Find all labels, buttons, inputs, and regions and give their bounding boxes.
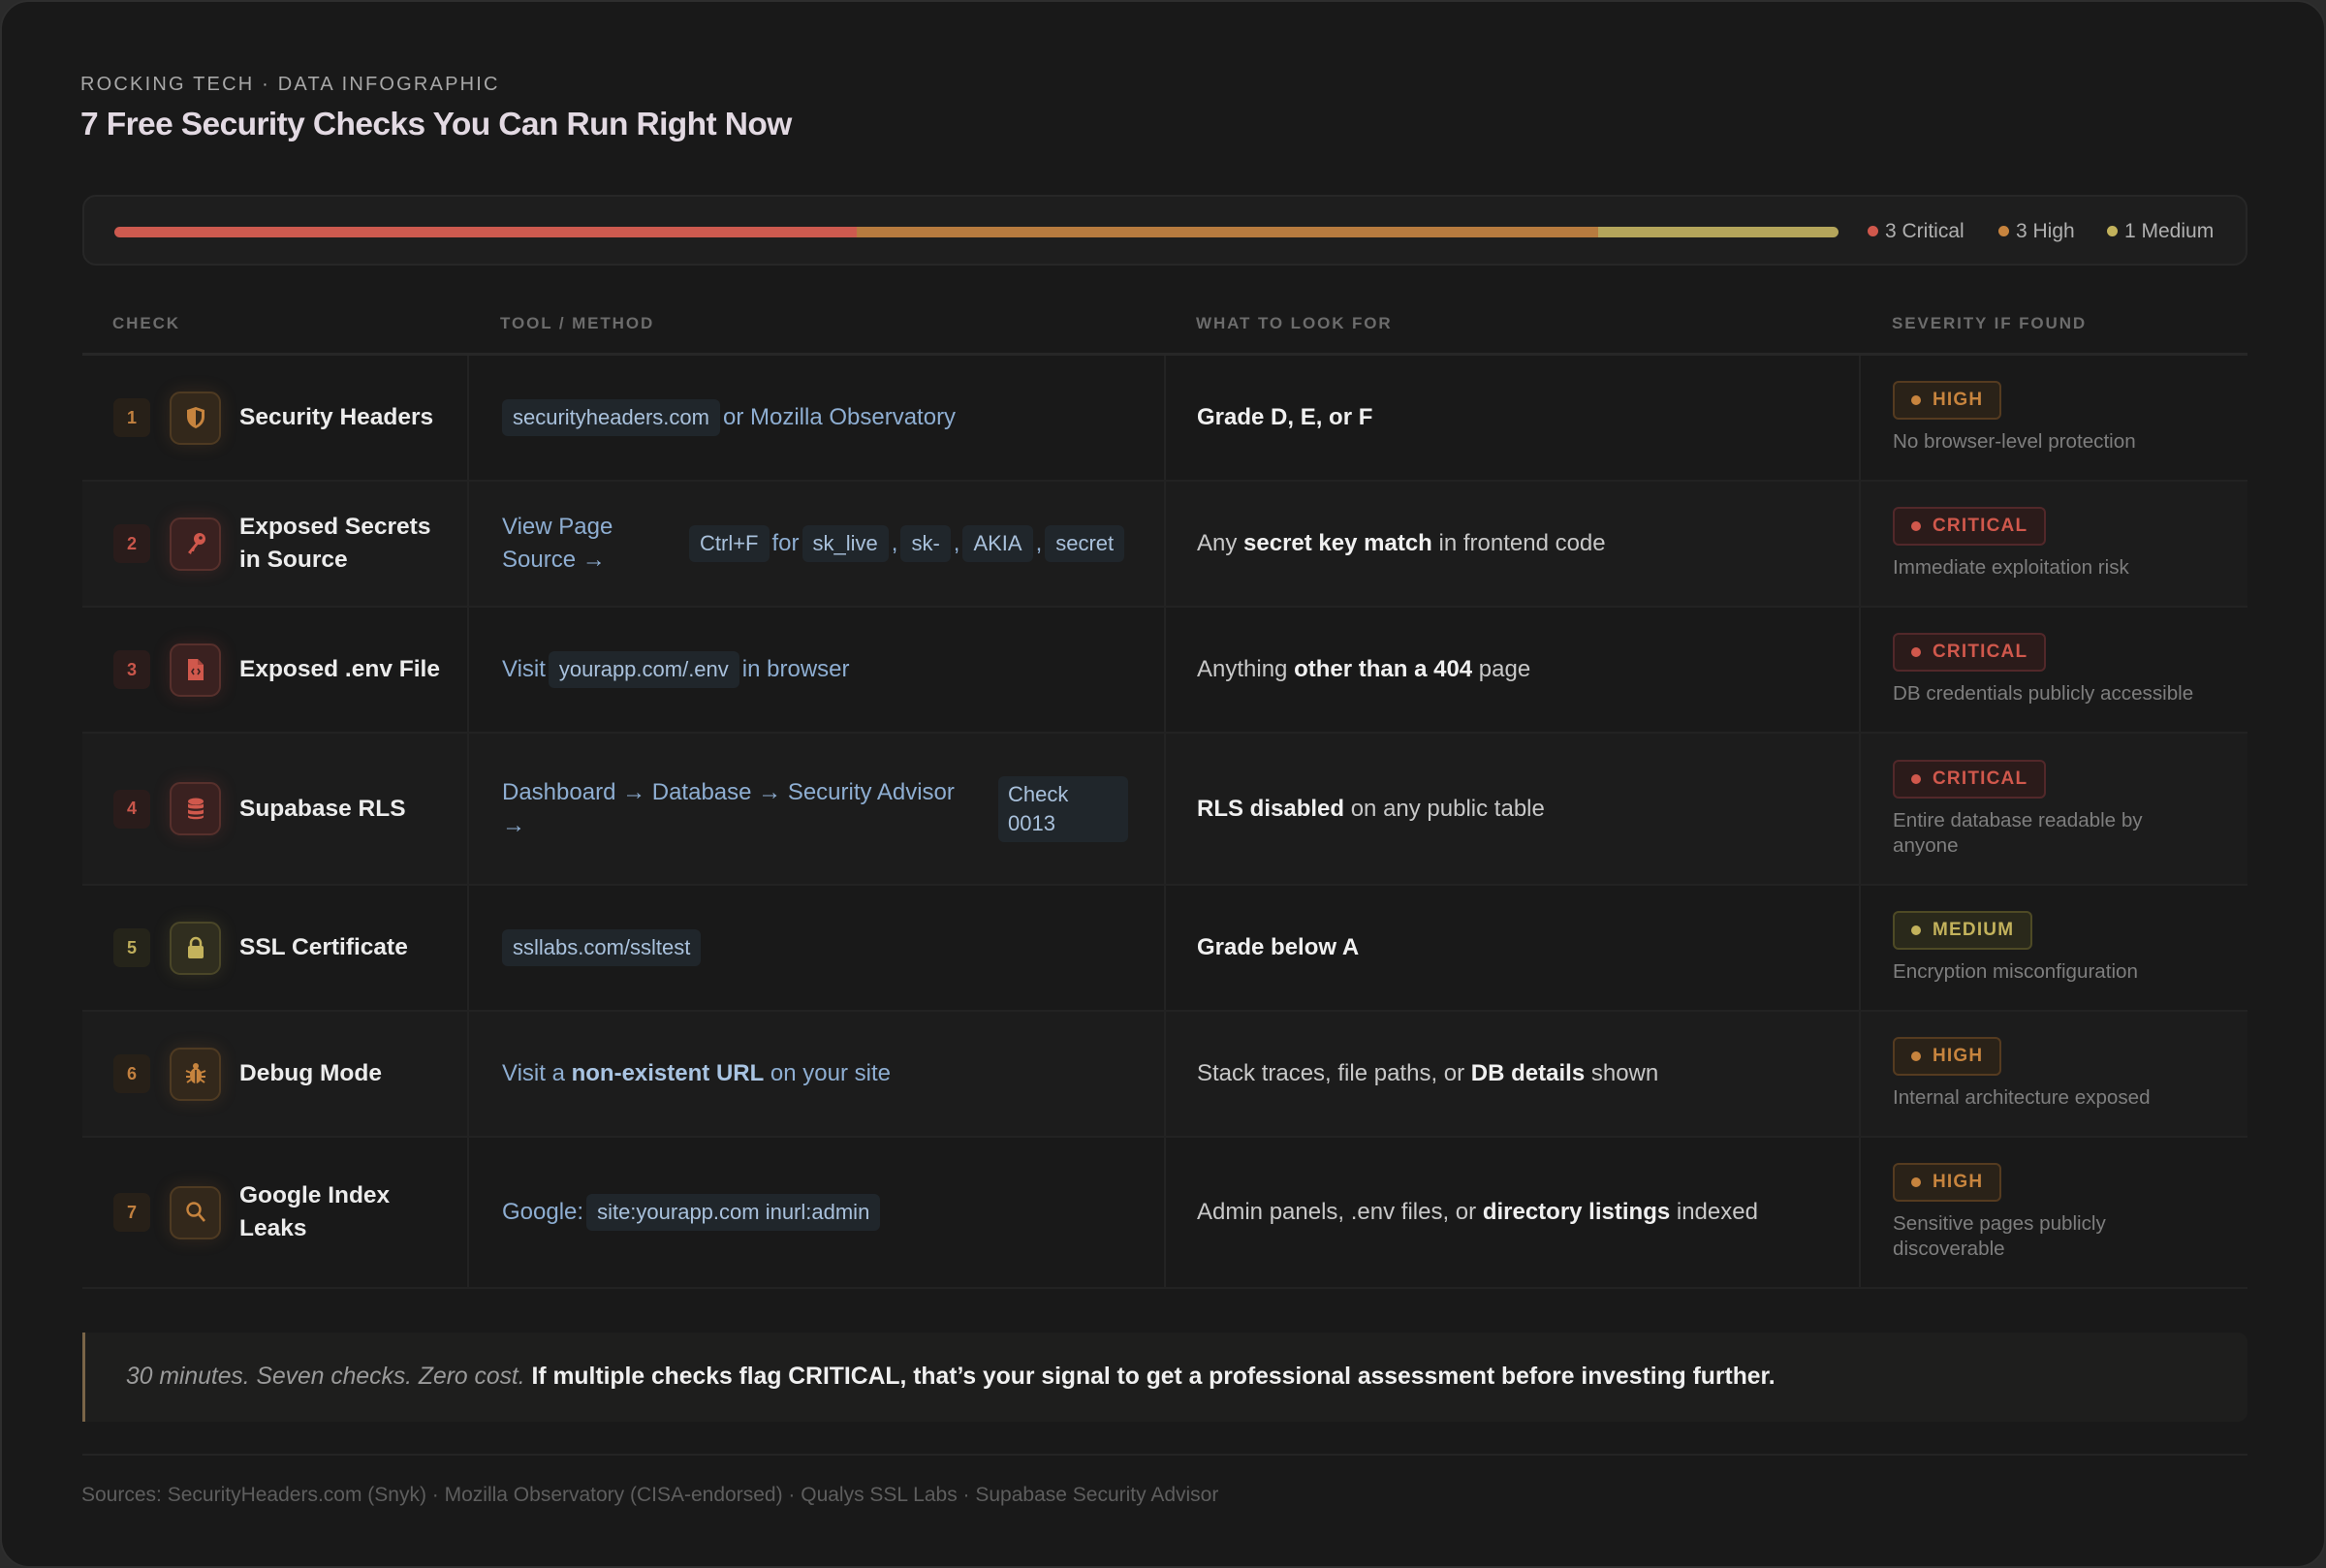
legend: high: 3 High <box>2016 220 2075 242</box>
header: tool: TOOL / METHOD <box>500 314 654 332</box>
row 5: ssl: MEDIUM <box>1933 920 2014 940</box>
row 2: exposed secrets: sk_live <box>813 531 878 555</box>
row 4: supabase rls <box>82 734 2247 886</box>
header: what to look for: WHAT TO LOOK FOR <box>1196 314 1393 332</box>
row 7: google index leaks: Google Index <box>239 1182 390 1208</box>
row 2: exposed secrets: Exposed Secrets <box>239 514 430 540</box>
row 4: supabase rls: → <box>502 812 525 837</box>
row 7: google index leaks: Admin panels, .env files, or directory listings indexed <box>1197 1199 1758 1225</box>
row 2: exposed secrets: sk- <box>911 531 940 555</box>
row 6: debug mode: Visit a non-existent URL on your site <box>502 1060 891 1086</box>
row 2: exposed secrets: CRITICAL <box>1933 516 2027 536</box>
row 7: google index leaks: Sensitive pages publicly discoverable <box>1893 1212 2106 1260</box>
panel: severity distribution bar <box>82 195 2247 266</box>
row 2: exposed secrets: 2 <box>127 533 137 552</box>
row 7: google index leaks: site:yourapp.com inurl:admin <box>597 1200 869 1224</box>
row 5: ssl: 5 <box>127 938 137 957</box>
eyebrow: ROCKING TECH · DATA INFOGRAPHIC <box>80 74 500 95</box>
row 2: exposed secrets: AKIA <box>973 531 1022 555</box>
row 6: debug mode: 6 <box>127 1064 137 1083</box>
row 3: exposed env <box>82 608 2247 734</box>
row 4: supabase rls: RLS disabled on any public table <box>1197 795 1545 822</box>
title: 7 Free Security Checks You Can Run Right Now <box>80 107 792 142</box>
row 3: exposed env: CRITICAL <box>1933 642 2027 662</box>
row 5: ssl: SSL Certificate <box>239 934 408 960</box>
row 4: supabase rls: CRITICAL <box>1933 768 2027 789</box>
row 7: google index leaks: 7 <box>127 1202 137 1221</box>
row 6: debug mode: Stack traces, file paths, or DB details shown <box>1197 1060 1658 1086</box>
row 1: security headers: HIGH <box>1933 390 1983 410</box>
bar: medium segment <box>1598 227 1839 237</box>
icon: lock <box>170 921 221 975</box>
row 2: exposed secrets: Immediate exploitation risk <box>1893 556 2129 579</box>
row 3: exposed env: 3 <box>127 659 137 678</box>
row 1: security headers: securityheaders.com <box>513 405 709 429</box>
row 2: exposed secrets: View Page Source → <box>502 514 613 573</box>
row 2: exposed secrets: Ctrl+F <box>700 531 758 555</box>
row 3: exposed env: Exposed .env File <box>239 656 440 682</box>
row 6: debug mode: Internal architecture exposed <box>1893 1086 2151 1109</box>
header: severity: SEVERITY IF FOUND <box>1892 314 2087 332</box>
row 7: google index leaks: HIGH <box>1933 1172 1983 1192</box>
row 1: security headers: 1 <box>127 407 137 426</box>
icon: file <box>170 643 221 696</box>
icon: bug <box>170 1047 221 1101</box>
bar: high segment <box>857 227 1598 237</box>
row 2: exposed secrets: Any secret key match in frontend code <box>1197 530 1606 556</box>
callout <box>82 1333 2247 1422</box>
header: check: CHECK <box>112 314 180 332</box>
row 4: supabase rls: Check 0013 <box>1008 781 1068 835</box>
row 5: ssl: ssllabs.com/ssltest <box>513 935 690 959</box>
row 3: exposed env: Visit in browser <box>502 656 849 682</box>
icon: shield <box>170 392 221 444</box>
row 7: google index leaks: Leaks <box>239 1215 306 1241</box>
icon: key <box>170 517 221 570</box>
row 6: debug mode: HIGH <box>1933 1046 1983 1066</box>
row 5: ssl: Encryption misconfiguration <box>1893 960 2138 983</box>
row 2: exposed secrets <box>82 482 2247 608</box>
row 2: exposed secrets: for , , , <box>771 530 1042 556</box>
row 6: debug mode <box>82 1012 2247 1138</box>
callout: 30 minutes. Seven checks. Zero cost. If multiple checks flag CRITICAL, that’s your signal to get a professional assessment before investing further. <box>126 1364 1776 1390</box>
row 4: supabase rls: Supabase RLS <box>239 795 406 822</box>
row 6: debug mode: Debug Mode <box>239 1060 382 1086</box>
sources footer: Sources: SecurityHeaders.com (Snyk) · Mozilla Observatory (CISA-endorsed) · Qualys SSL Labs · Supabase Security Advisor <box>81 1484 1218 1506</box>
legend: critical: 3 Critical <box>1885 220 1965 242</box>
row 4: supabase rls: 4 <box>127 799 137 818</box>
row 1: security headers: Security Headers <box>239 404 433 430</box>
row 1: security headers <box>82 356 2247 482</box>
icon: search <box>170 1186 221 1239</box>
row 7: google index leaks: Google: <box>502 1199 583 1225</box>
row 4: supabase rls: Entire database readable by anyone <box>1893 808 2143 857</box>
row 7: google index leaks <box>82 1138 2247 1289</box>
row 1: security headers: or Mozilla Observatory <box>723 404 956 430</box>
row 3: exposed env: DB credentials publicly accessible <box>1893 682 2193 705</box>
bar: critical segment <box>114 227 857 237</box>
row 5: ssl: Grade below A <box>1197 934 1359 960</box>
row 3: exposed env: yourapp.com/.env <box>559 657 729 681</box>
row 2: exposed secrets: in Source <box>239 547 348 573</box>
row 1: security headers: No browser-level protection <box>1893 430 2136 453</box>
icon: database <box>170 782 221 835</box>
row 5: ssl <box>82 886 2247 1012</box>
row 3: exposed env: Anything other than a 404 page <box>1197 656 1530 682</box>
legend: medium: 1 Medium <box>2124 220 2214 242</box>
row 1: security headers: Grade D, E, or F <box>1197 404 1372 430</box>
row 2: exposed secrets: secret <box>1055 531 1114 555</box>
row 4: supabase rls: Dashboard → Database → Security Advisor <box>502 779 955 804</box>
